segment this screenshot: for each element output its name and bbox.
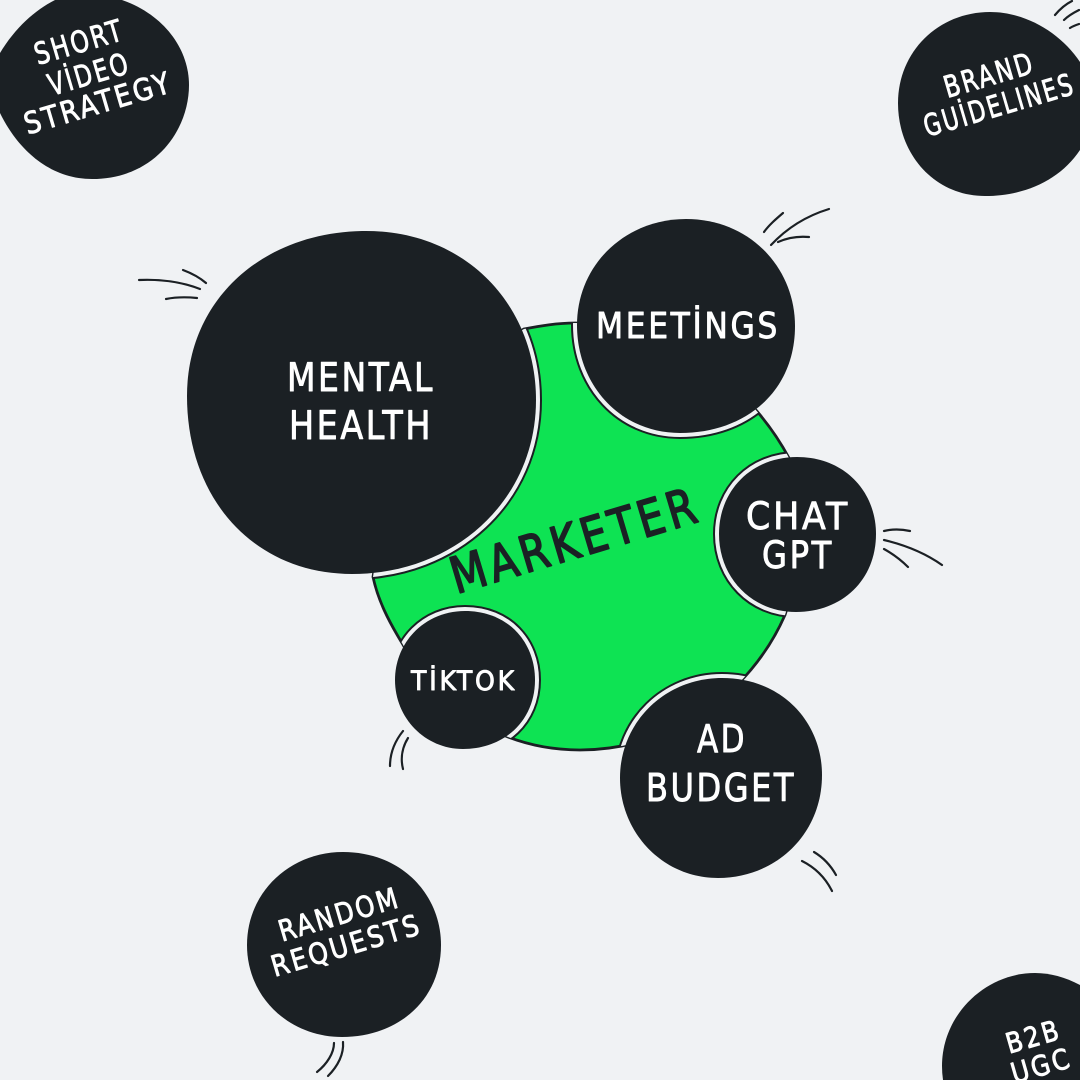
motion lines: random requests: [317, 1042, 343, 1076]
bubble: b2b ugc: [942, 973, 1080, 1080]
motion lines: tiktok: [390, 731, 408, 769]
bubble: short video strategy: VİDEO: [44, 45, 135, 104]
bubble: ad budget: [620, 678, 822, 878]
bubble: ad budget: BUDGET: [646, 766, 796, 810]
bubble: mental health: HEALTH: [289, 404, 433, 449]
bubble: b2b ugc: B2B: [1002, 1013, 1065, 1060]
bubble: mental health: [187, 231, 536, 574]
bubble: random requests: [247, 852, 441, 1037]
bubble: meetings: [577, 219, 795, 433]
motion lines: mental health: [139, 270, 206, 299]
bubble: mental health: MENTAL: [287, 356, 435, 401]
bubble: chat gpt: CHAT: [746, 495, 850, 538]
bubble: short video strategy: SHORT: [30, 13, 128, 73]
bubble: chat gpt: GPT: [762, 534, 834, 577]
label: marketer: MARKETER: [443, 476, 707, 605]
motion lines: meetings: [764, 209, 829, 245]
bubble: ad budget: AD: [697, 717, 747, 761]
motion lines: chat gpt: [884, 530, 942, 567]
bubble: random requests: REQUESTS: [267, 907, 425, 984]
bubble: tiktok: TİKTOK: [410, 665, 517, 697]
bubble: short video strategy: STRATEGY: [20, 65, 177, 142]
green circle: marketer: [373, 323, 797, 750]
motion lines: ad budget: [802, 852, 836, 891]
bubble: meetings: MEETİNGS: [596, 305, 780, 347]
bubble: brand guidelines: [898, 12, 1080, 196]
bubble: brand guidelines: BRAND: [940, 46, 1039, 106]
bubble: random requests: RANDOM: [274, 880, 404, 948]
motion lines: brand guidelines: [1055, 1, 1079, 28]
bubble: chat gpt: [719, 457, 876, 612]
bubble: short video strategy: [0, 0, 189, 179]
bubble: tiktok: [395, 611, 535, 749]
